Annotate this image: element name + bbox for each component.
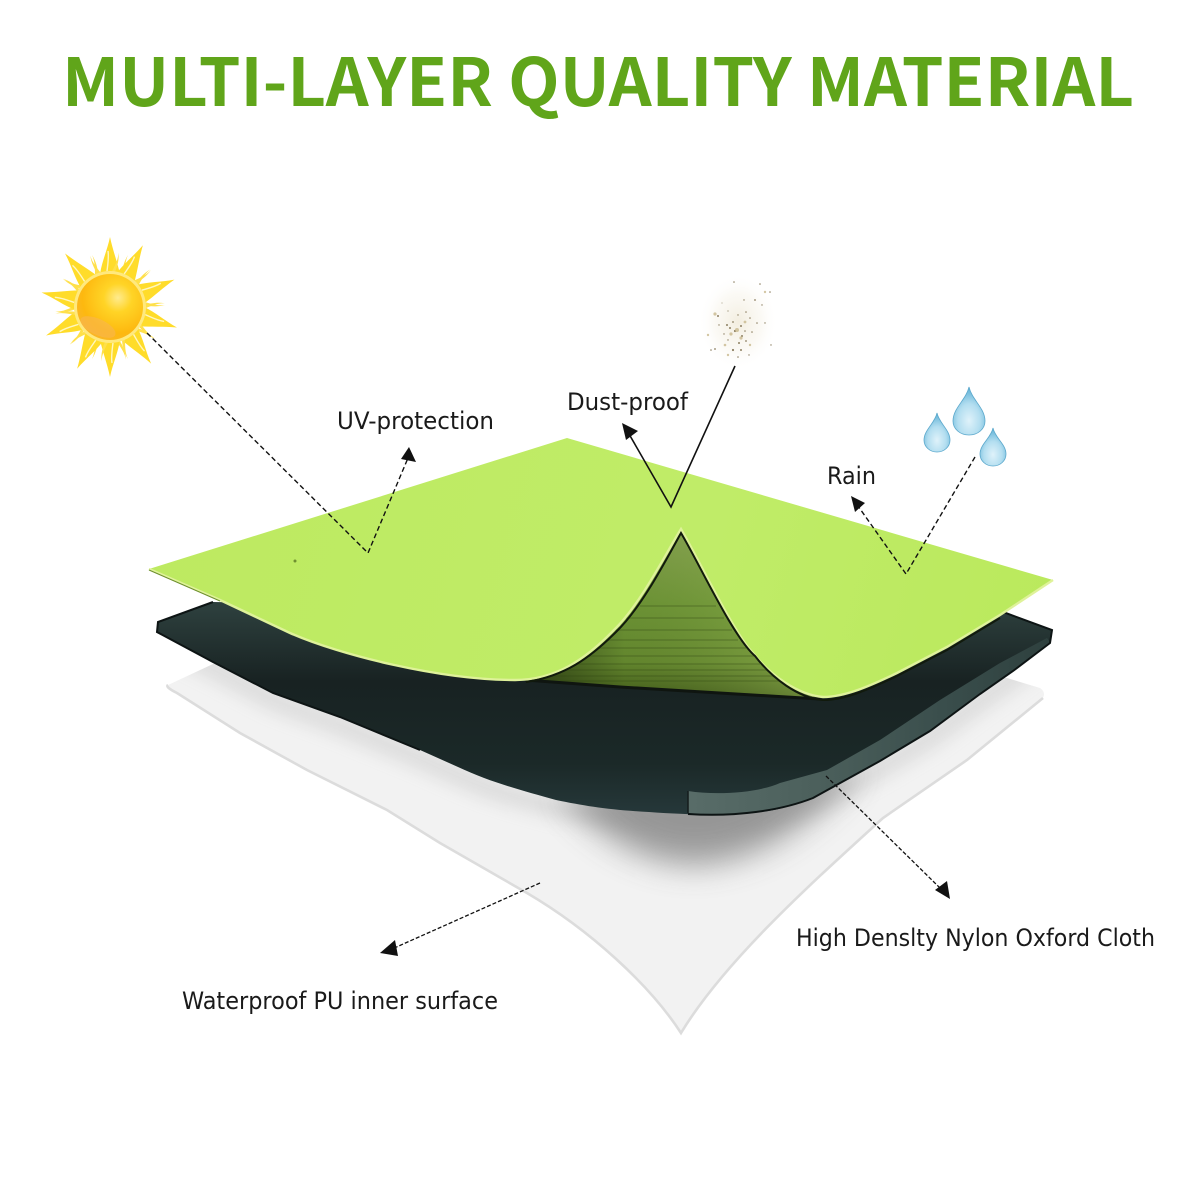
icon: dust cloud [698,274,778,370]
label: Rain: Rain [827,462,876,490]
white PU layer [157,640,1050,1033]
edge strip and lighter tab [688,638,1050,815]
arrow: UV protection [147,333,416,553]
label: Dust-proof: Dust-proof [567,388,689,416]
arrow: PU surface [380,883,540,956]
green top layer [149,438,1053,700]
icon: sun [38,237,182,377]
arrow: dust proof [622,366,735,507]
arrow: nylon oxford cloth [826,776,950,899]
label: Waterproof PU inner surface: Waterproof PU inner surface [182,987,498,1015]
dark nylon oxford layer [157,602,1052,815]
shadow under dark layer [560,760,860,865]
icon: water drops [924,387,1006,466]
arrow: rain [851,457,975,574]
title: MULTI-LAYER QUALITY MATERIAL [62,30,1134,126]
label: UV-protection: UV-protection [337,407,494,435]
label: High Density Nylon Oxford Cloth: High Denslty Nylon Oxford Cloth [796,924,1155,952]
green underside flap [525,529,820,699]
